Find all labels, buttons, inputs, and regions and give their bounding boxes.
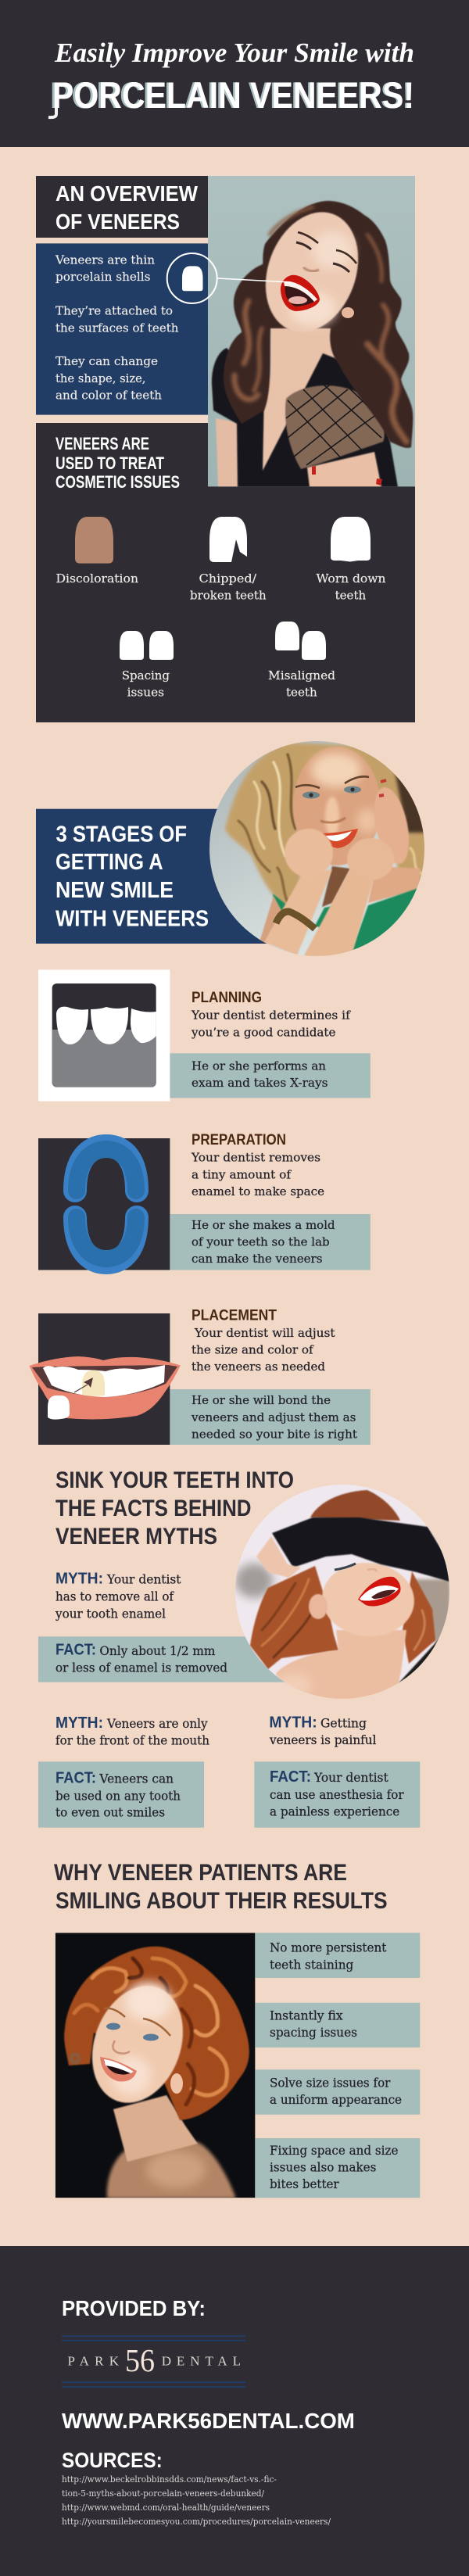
photo: blonde woman	[209, 741, 428, 957]
banner: 3 stages heading: WITH VENEERS	[55, 906, 209, 931]
myth 1: has to remove all of	[55, 1589, 174, 1604]
step: preparation: a tiny amount of	[192, 1167, 292, 1181]
step text: PLANNING	[192, 989, 262, 1006]
heading: myths	[55, 1467, 294, 1550]
step text: PLACEMENT	[192, 1307, 277, 1324]
fact 2: be used on any tooth	[55, 1788, 181, 1803]
fact 3: can use anesthesia for	[270, 1787, 404, 1802]
icon: chipped tooth	[190, 517, 267, 603]
header band	[0, 0, 469, 147]
panel: overview facts: Veneers are thin	[55, 253, 155, 267]
icon: spacing issues	[120, 631, 174, 699]
benefit 2	[255, 2003, 420, 2048]
step: planning: you’re a good candidate	[191, 1025, 336, 1039]
icon: chipped tooth: broken teeth	[190, 589, 267, 603]
myth 1: MYTH:	[55, 1571, 103, 1588]
step: planning	[38, 969, 371, 1102]
icon: smile with veneer	[30, 1313, 181, 1445]
heading: cosmetic issues: VENEERS ARE	[55, 434, 149, 453]
myth 3: Getting	[320, 1715, 367, 1730]
source links: tion-5-myths-about-porcelain-veneers-debunked/	[62, 2488, 264, 2499]
icon: worn down tooth: teeth	[335, 589, 367, 603]
website: WWW.PARK56DENTAL.COM	[62, 2409, 355, 2433]
step: preparation: Your dentist removes	[191, 1151, 320, 1165]
panel: overview heading: OF VENEERS	[55, 210, 180, 234]
step teal note: veneers and adjust them as	[191, 1410, 356, 1424]
icon: discoloration: Discoloration	[56, 571, 138, 586]
myth 2: Veneers are only	[106, 1716, 208, 1731]
photo: woman with arm over eyes	[234, 1484, 455, 1703]
step teal note	[170, 1389, 371, 1445]
benefit 2: spacing issues	[270, 2025, 357, 2040]
benefit 1: teeth staining	[270, 1957, 353, 1972]
icon: misaligned teeth: teeth	[286, 685, 317, 699]
step teal note	[170, 1214, 371, 1270]
source links: http://www.beckelrobbinsdds.com/news/fact-vs.-fic-	[62, 2474, 277, 2485]
source links	[62, 2474, 331, 2527]
panel: overview facts	[36, 243, 208, 415]
myth 3	[269, 1714, 376, 1747]
heading: myths: SINK YOUR TEETH INTO	[55, 1467, 294, 1493]
icon: discoloration	[56, 517, 138, 586]
step teal note: exam and takes X-rays	[192, 1076, 328, 1090]
panel: overview heading: AN OVERVIEW	[55, 181, 199, 206]
step teal note: of your teeth so the lab	[192, 1235, 330, 1249]
logo: Park 56 Dental: 56	[125, 2342, 155, 2378]
fact 3: FACT:	[270, 1768, 311, 1786]
myth 2: for the front of the mouth	[55, 1733, 209, 1748]
icon: chipped tooth: Chipped/	[199, 571, 257, 586]
heading: cosmetic issues	[55, 434, 180, 492]
fact 2: Veneers can	[98, 1772, 174, 1786]
myth 2: MYTH:	[55, 1714, 103, 1732]
panel: overview facts: They’re attached to	[55, 303, 173, 317]
heading: myths: VENEER MYTHS	[55, 1524, 217, 1550]
heading: results: SMILING ABOUT THEIR RESULTS	[55, 1888, 388, 1914]
step teal note: He or she makes a mold	[192, 1218, 335, 1232]
heading: cosmetic issues: COSMETIC ISSUES	[55, 472, 180, 492]
logo: Park 56 Dental: DENTAL	[162, 2354, 241, 2369]
banner: 3 stages heading	[36, 809, 286, 944]
panel: overview heading	[36, 176, 208, 238]
title main line: PORCELAIN VENEERS!	[52, 74, 414, 116]
benefit 3	[255, 2069, 420, 2115]
benefit 1: No more persistent	[270, 1940, 387, 1955]
logo: Park 56 Dental: PARK	[67, 2354, 120, 2369]
benefit 4: Fixing space and size	[270, 2143, 398, 2158]
source links: http://yoursmilebecomesyou.com/procedures/porcelain-veneers/	[62, 2516, 331, 2527]
step: preparation	[38, 1131, 371, 1270]
icon: tooth callout with leader line	[167, 253, 291, 303]
myth 1	[55, 1571, 181, 1621]
heading: cosmetic issues: USED TO TREAT	[55, 453, 164, 473]
myth 1: your tooth enamel	[55, 1606, 166, 1621]
fact 1: FACT:	[55, 1642, 96, 1659]
fact 1: Only about 1/2 mm	[99, 1643, 215, 1658]
step: placement: the size and color of	[192, 1342, 314, 1356]
banner: 3 stages heading: GETTING A	[55, 850, 163, 875]
heading: sources: SOURCES:	[62, 2449, 163, 2472]
title script line: Easily Improve Your Smile with	[54, 38, 414, 68]
banner: 3 stages heading: 3 STAGES OF	[56, 822, 187, 847]
benefit 4: issues also makes	[270, 2160, 376, 2175]
logo: Park 56 Dental	[62, 2335, 246, 2388]
myth 2	[55, 1714, 209, 1748]
heading: results	[54, 1860, 388, 1914]
heading: myths: THE FACTS BEHIND	[55, 1496, 252, 1521]
icon: misaligned teeth: Misaligned	[268, 668, 335, 683]
fact 1	[38, 1636, 288, 1682]
source links: http://www.webmd.com/oral-health/guide/veneers	[62, 2502, 270, 2513]
benefit 2: Instantly fix	[270, 2008, 343, 2022]
icon: misaligned teeth	[268, 622, 335, 699]
title main line: PORCELAIN VENEERS!	[50, 74, 413, 116]
benefit 3: a uniform appearance	[270, 2092, 402, 2107]
step teal note: needed so your bite is right	[192, 1428, 357, 1442]
icon: worn down tooth: Worn down	[316, 571, 386, 586]
myth 3: veneers is painful	[269, 1732, 376, 1747]
step: placement: Your dentist will adjust	[194, 1326, 335, 1340]
heading: results: WHY VENEER PATIENTS ARE	[54, 1860, 347, 1886]
benefit 3: Solve size issues for	[270, 2075, 391, 2090]
step: placement	[30, 1307, 371, 1445]
step teal note: can make the veneers	[192, 1252, 322, 1266]
panel: overview facts: the shape, size,	[55, 371, 145, 385]
footer band	[0, 2246, 469, 2576]
panel: overview facts: They can change	[55, 354, 158, 368]
icon: blue dental mold	[38, 1138, 170, 1270]
banner: 3 stages heading: NEW SMILE	[55, 878, 174, 903]
step: planning: Your dentist determines if	[191, 1009, 351, 1023]
benefit 1	[255, 1933, 420, 1978]
fact 3: a painless experience	[270, 1804, 399, 1819]
step text: PREPARATION	[192, 1131, 286, 1148]
photo: woman with red lips	[208, 176, 415, 487]
fact 1: or less of enamel is removed	[55, 1661, 227, 1675]
icon: worn down tooth	[316, 517, 386, 603]
benefit 4: bites better	[270, 2177, 339, 2191]
step: placement: the veneers as needed	[192, 1360, 325, 1374]
panel: overview facts: and color of teeth	[55, 389, 162, 403]
fact 3: Your dentist	[313, 1770, 388, 1785]
icon: spacing issues: issues	[127, 685, 164, 699]
fact 2	[38, 1761, 204, 1828]
fact 2: to even out smiles	[55, 1805, 165, 1820]
step teal note	[170, 1053, 371, 1098]
icon: x-ray teeth	[38, 969, 170, 1102]
benefit 4	[255, 2138, 420, 2198]
panel: overview facts: the surfaces of teeth	[55, 321, 179, 335]
panel: overview facts: porcelain shells	[55, 270, 150, 284]
panel: dark issues background	[36, 423, 415, 722]
fact 2: FACT:	[55, 1770, 96, 1787]
step: preparation: enamel to make space	[192, 1184, 324, 1198]
photo: curly red-haired woman	[55, 1933, 255, 2198]
myth 1: Your dentist	[106, 1572, 181, 1587]
myth 3: MYTH:	[269, 1714, 317, 1731]
step teal note: He or she performs an	[192, 1059, 326, 1073]
fact 3	[254, 1761, 420, 1828]
benefit list	[255, 1933, 420, 2198]
icon: spacing issues: Spacing	[122, 668, 170, 683]
heading: provided by: PROVIDED BY:	[62, 2296, 206, 2320]
step teal note: He or she will bond the	[192, 1393, 331, 1407]
